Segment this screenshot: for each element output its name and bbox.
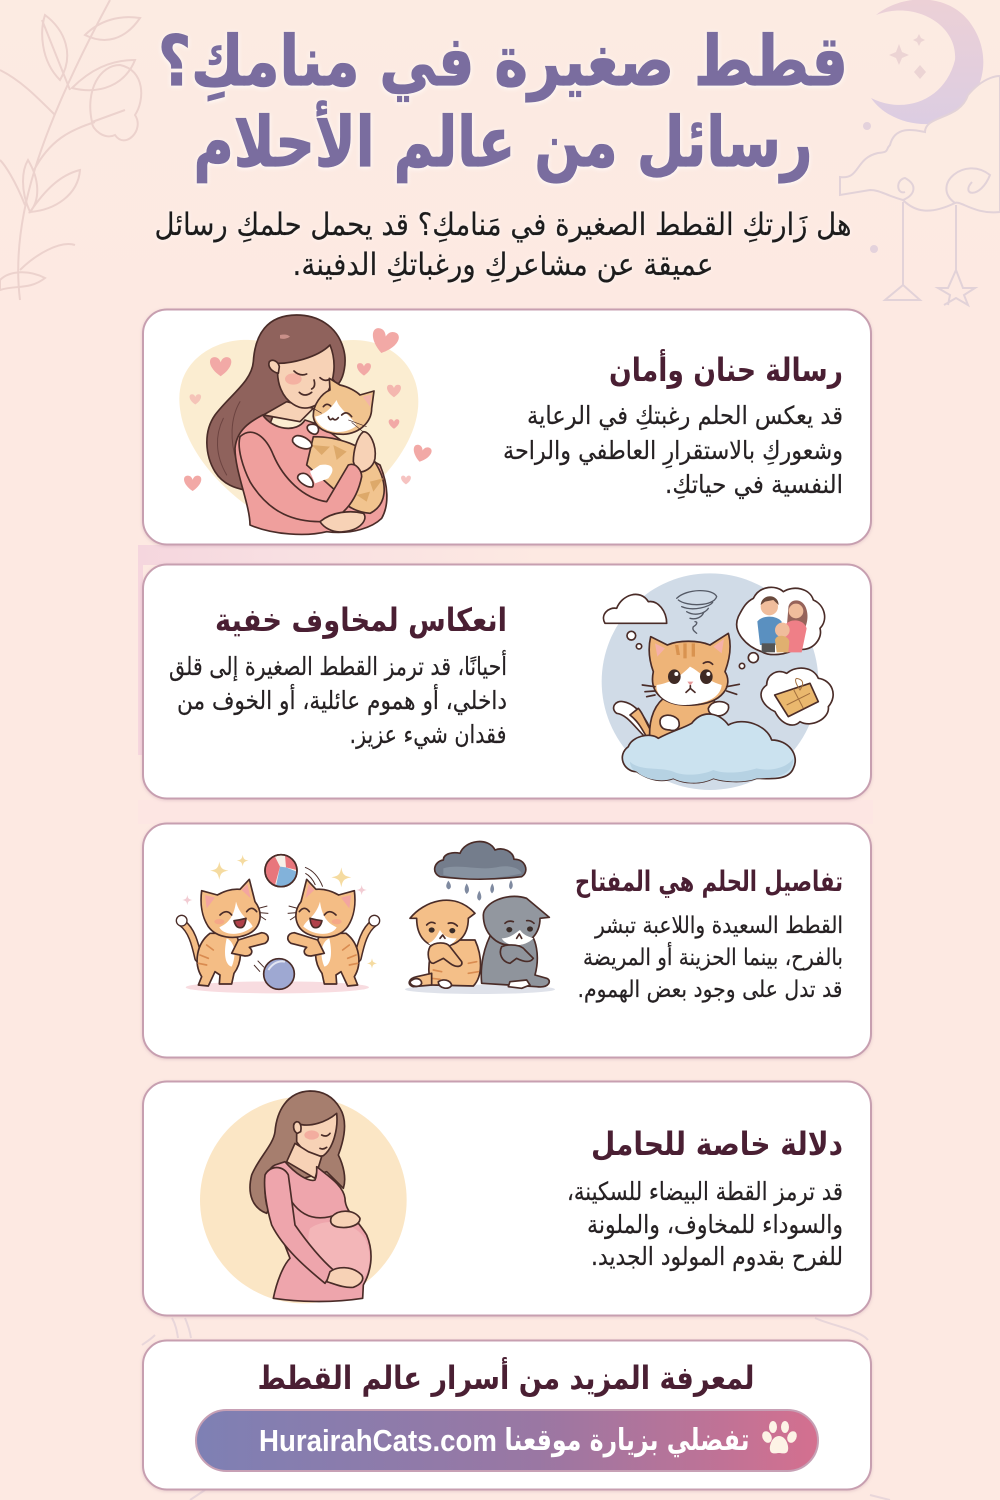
- body: tenderness: النفسية في حياتكِ.: [665, 470, 843, 499]
- body: dream details: بالفرح، بينما الحزينة أو المريضة: [583, 942, 843, 971]
- heading: pregnant women: دلالة خاصة للحامل: [591, 1125, 843, 1163]
- panel: call to action: [143, 1340, 871, 1490]
- illustration: pregnant woman: [200, 1091, 407, 1303]
- heading: call to action: لمعرفة المزيد من أسرار عالم القطط: [258, 1357, 754, 1397]
- title line 2: رسائل من عالم الأحلام: [194, 101, 812, 184]
- panel: pregnant women: [143, 1082, 871, 1316]
- heading: hidden fears: انعكاس لمخاوف خفية: [215, 601, 507, 639]
- body: dream details: القطط السعيدة واللاعبة تبشر: [594, 913, 843, 939]
- intro text: هل زَارتكِ القطط الصغيرة في مَنامكِ؟ قد يحمل حلمكِ رسائل: [154, 207, 852, 243]
- icon: paw: [760, 1421, 799, 1453]
- body: pregnant women: قد ترمز القطة البيضاء للسكينة،: [567, 1177, 843, 1206]
- illustration: woman hugging kitten: [179, 315, 432, 535]
- body: tenderness: وشعوركِ بالاستقرارِ العاطفي والراحة: [503, 436, 843, 469]
- intro text: [154, 207, 852, 283]
- intro text: عميقة عن مشاعركِ ورغباتكِ الدفينة.: [292, 247, 714, 283]
- body: pregnant women: [567, 1177, 843, 1272]
- body: hidden fears: [169, 649, 507, 749]
- title line 1: قطط صغيرة في منامكِ؟: [158, 22, 848, 102]
- background: cloud and hanging stars: [840, 76, 1000, 305]
- background: faint bottom flourishes: [142, 1318, 890, 1500]
- panel: dream details: [143, 824, 871, 1058]
- panel: hidden fears: [143, 564, 871, 798]
- button text: URL: HurairahCats.com: [259, 1423, 497, 1458]
- body: dream details: [578, 913, 843, 1003]
- body: pregnant women: للفرح بقدوم المولود الجديد.: [591, 1242, 843, 1272]
- heading: tenderness: رسالة حنان وأمان: [609, 349, 843, 389]
- illustration: worried kitten with thought bubbles: [602, 573, 833, 790]
- background: floral line art: [0, 0, 141, 300]
- body: tenderness: [503, 401, 843, 499]
- button text: Arabic: تفضلي بزيارة موقعنا: [504, 1423, 750, 1458]
- body: hidden fears: أحيانًا، قد ترمز القطط الصغيرة إلى قلق: [169, 649, 507, 682]
- sad kittens: [405, 842, 555, 994]
- heading: dream details: تفاصيل الحلم هي المفتاح: [575, 865, 843, 898]
- body: pregnant women: والسوداء للمخاوف، والملونة: [587, 1210, 843, 1240]
- illustration: playful and sad kittens: [176, 842, 555, 994]
- background: crescent moon: [863, 0, 983, 253]
- happy kittens: [176, 855, 380, 993]
- body: hidden fears: داخلي، أو هموم عائلية، أو الخوف من: [177, 683, 507, 716]
- body: tenderness: قد يعكس الحلم رغبتكِ في الرعاية: [527, 401, 843, 431]
- button: visit website: [196, 1410, 818, 1471]
- body: hidden fears: فقدان شيء عزيز.: [350, 720, 506, 749]
- body: dream details: قد تدل على وجود بعض الهموم.: [578, 977, 842, 1003]
- panel: tenderness message: [143, 310, 871, 544]
- background wash: [0, 0, 1000, 824]
